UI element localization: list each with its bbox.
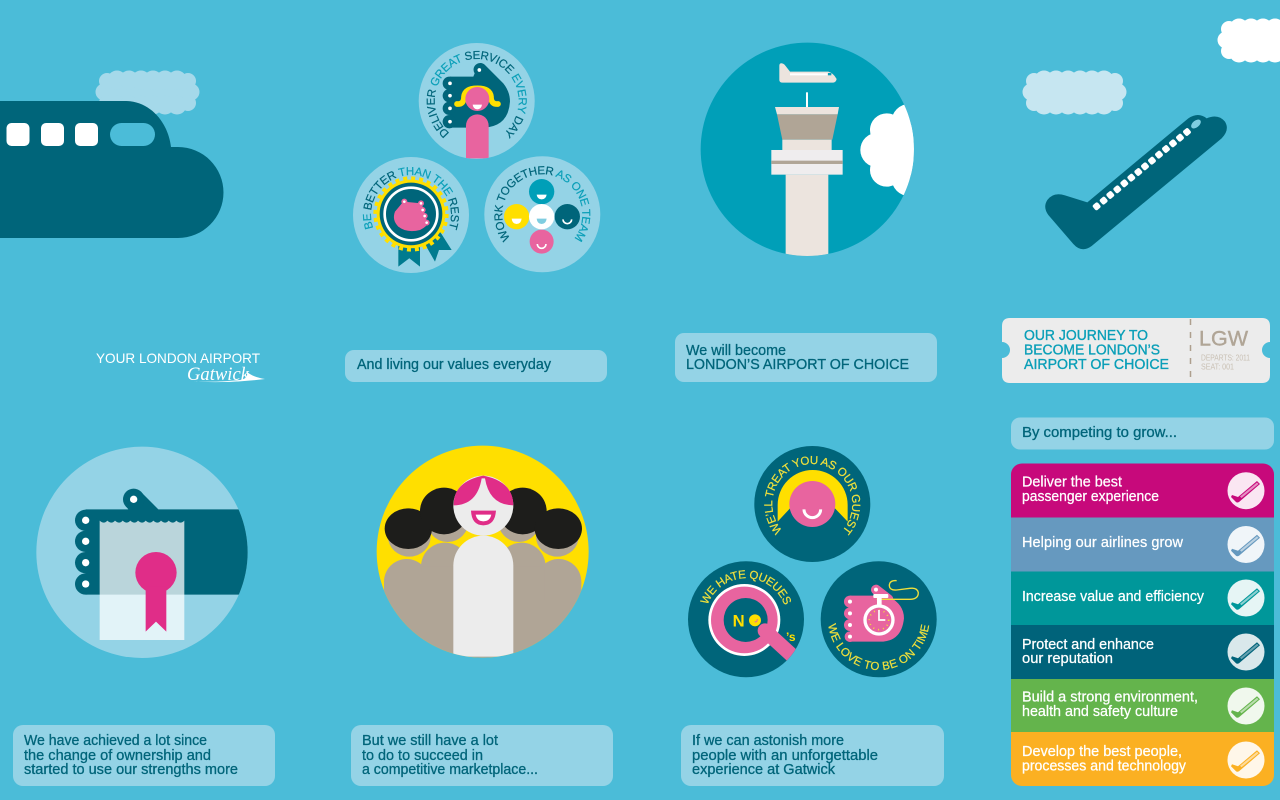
icon: small plane xyxy=(779,63,837,83)
icon: no Qs: N xyxy=(733,612,745,631)
badge text: queues: WE HATE QUEUES xyxy=(700,570,791,604)
text: if we can astonish: experience at Gatwick xyxy=(692,762,836,778)
illustration: hand holding certificate xyxy=(36,447,263,658)
badge: work together as one team xyxy=(484,156,600,272)
badge text: work together: WORK TOGETHER AS ONE TEAM xyxy=(494,166,590,242)
icon: hand holding stopwatch xyxy=(844,581,918,642)
illustration: control tower in circle xyxy=(701,43,929,258)
text: but we still: to do to succeed in xyxy=(362,748,483,764)
row: passenger experience: passenger experience xyxy=(1022,489,1159,505)
ticket stub: LGW xyxy=(1199,328,1248,351)
icon: ribbon xyxy=(135,552,177,632)
ticket heading: OUR JOURNEY TO xyxy=(1024,327,1148,344)
text: if we can astonish: people with an unforgettable xyxy=(692,748,878,764)
badge text: on time: WE LOVE TO BE ON TIME xyxy=(828,622,930,670)
row: reputation xyxy=(1022,634,1264,670)
row: people: Develop the best people, xyxy=(1022,744,1182,760)
row: airlines: Helping our airlines grow xyxy=(1022,535,1184,551)
people bodies xyxy=(384,526,582,658)
badge: deliver great service every day xyxy=(418,43,535,159)
ticket stub xyxy=(1199,328,1250,372)
icon: hand xyxy=(75,489,263,595)
ticket: our journey xyxy=(1002,318,1270,383)
icon: five team faces xyxy=(504,179,580,254)
people hair xyxy=(385,488,582,549)
icon: plane shaped checkmark xyxy=(1045,115,1227,249)
row: environment xyxy=(1022,688,1264,724)
row: passenger experience: Deliver the best xyxy=(1022,475,1122,491)
ticket stub: DEPARTS: 2011 xyxy=(1201,354,1250,363)
cloud: white cloud top right xyxy=(1218,18,1280,62)
row: people: processes and technology xyxy=(1022,758,1187,774)
icon: rosette with hand xyxy=(375,178,452,267)
row: airlines xyxy=(1022,526,1264,563)
text: we have achieved a lot: We have achieved a lot since xyxy=(24,733,207,749)
cloud: left pale cloud xyxy=(96,70,200,114)
text: but we still: But we still have a lot xyxy=(362,733,498,749)
cloud: pale cloud right xyxy=(1022,70,1126,114)
row: environment: Build a strong environment, xyxy=(1022,690,1198,706)
row backgrounds xyxy=(1011,464,1274,786)
panel: by competing to grow xyxy=(1011,418,1274,450)
text: and living our values: And living our values everyday xyxy=(357,357,552,373)
logo: your London airport Gatwick: YOUR LONDON AIRPORT xyxy=(96,350,260,366)
row: people xyxy=(1022,742,1264,778)
logo: your London airport Gatwick xyxy=(96,350,265,385)
icon: cloud xyxy=(860,104,914,195)
panel: we will become xyxy=(675,333,937,382)
text: but we still xyxy=(362,733,538,778)
illustration: crowd of people xyxy=(377,446,589,662)
badge: we'll treat you as our guest xyxy=(754,446,870,562)
icon: no Qs: ’s xyxy=(786,630,796,644)
text: by competing to grow: By competing to grow... xyxy=(1022,425,1177,441)
icon: aeroplane nose xyxy=(0,101,223,238)
icon: tower xyxy=(771,92,843,258)
icon: hand holding person xyxy=(443,63,510,158)
row: reputation: our reputation xyxy=(1022,651,1113,667)
text: we have achieved a lot: the change of ownership and xyxy=(24,748,211,764)
central person xyxy=(453,476,513,657)
badge: be better than the rest xyxy=(353,157,469,273)
panel: but we still have a lot xyxy=(351,725,613,786)
text: if we can astonish xyxy=(692,733,878,778)
badge text: deliver great service: DELIVER GREAT SERVICE EVERY DAY xyxy=(426,50,527,139)
badge text: be better: BE BETTER THAN THE REST xyxy=(362,167,460,230)
badge: we love to be on time xyxy=(820,561,937,678)
text: if we can astonish: If we can astonish more xyxy=(692,733,844,749)
icon: no Qs xyxy=(708,584,796,657)
row: environment: health and safety culture xyxy=(1022,704,1178,720)
text: London's airport of choice: LONDON’S AIRPORT OF CHOICE xyxy=(686,357,909,373)
row: value and efficiency: Increase value and efficiency xyxy=(1022,589,1205,605)
list: strategic priorities xyxy=(1011,464,1274,786)
text: we have achieved a lot: started to use our strengths more xyxy=(24,762,238,778)
icon: guest face xyxy=(778,470,848,527)
icon: certificate xyxy=(100,521,184,640)
row: passenger experience xyxy=(1022,472,1264,509)
row: reputation: Protect and enhance xyxy=(1022,637,1154,653)
text: but we still: a competitive marketplace... xyxy=(362,762,538,778)
row: value and efficiency xyxy=(1022,580,1264,616)
badge: we hate queues xyxy=(688,561,804,678)
logo: your London airport Gatwick: Gatwick xyxy=(187,364,250,385)
ticket heading: BECOME LONDON’S xyxy=(1024,342,1160,359)
text: we will become: We will become xyxy=(686,343,786,359)
panel: if we can astonish xyxy=(681,725,944,786)
ticket heading xyxy=(1024,327,1169,373)
ticket heading: AIRPORT OF CHOICE xyxy=(1024,356,1169,373)
text: we have achieved a lot xyxy=(24,733,238,778)
badge text: guest: WE’LL TREAT YOU AS OUR GUEST xyxy=(764,456,860,536)
panel: we have achieved a lot xyxy=(13,725,275,786)
panel: and living our values xyxy=(345,350,607,382)
ticket stub: SEAT: 001 xyxy=(1201,362,1234,372)
